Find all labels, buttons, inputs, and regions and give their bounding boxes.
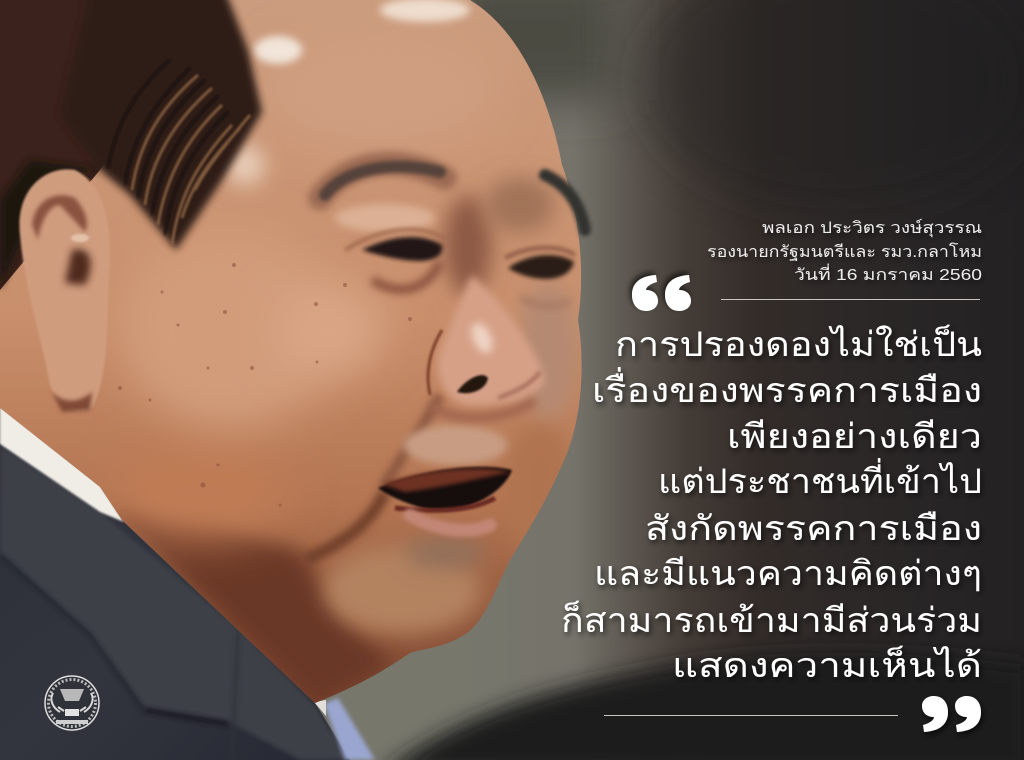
- chin: [324, 546, 480, 634]
- far cheek: [518, 426, 566, 542]
- suit jacket: [0, 443, 350, 760]
- heading: speaker attribution: วันที่ 16 มกราคม 2560: [794, 263, 982, 284]
- quote text: แสดงความเห็นได้: [672, 645, 982, 685]
- heading: speaker attribution: [707, 218, 982, 284]
- divider bottom: [604, 715, 898, 716]
- icon: closing quote mark: [922, 696, 981, 732]
- quote text: และมีแนวความคิดต่างๆ: [594, 555, 982, 593]
- hair: [0, 0, 262, 290]
- divider top: [721, 299, 980, 300]
- quote text: แต่ประชาชนที่เข้าไป: [658, 458, 982, 501]
- government seal: [45, 676, 99, 730]
- shirt collar: [0, 406, 124, 522]
- quote text: เพียงอย่างเดียว: [727, 418, 982, 456]
- eyebrows: [320, 164, 585, 230]
- icon: opening quote mark: [632, 275, 691, 311]
- quote text: ก็สามารถเข้ามามีส่วนร่วม: [561, 600, 982, 640]
- quote text: [561, 324, 982, 685]
- ear: [19, 169, 110, 412]
- mouth: [378, 467, 512, 530]
- quote text: การปรองดองไม่ใช่เป็น: [615, 324, 982, 364]
- upper lip: [403, 425, 507, 465]
- between the eyes: [444, 195, 492, 295]
- tie: [324, 698, 375, 760]
- nose: [428, 275, 545, 418]
- neck and jaw shading: [110, 510, 395, 710]
- cheek fold: [305, 492, 385, 560]
- quote text: สังกัดพรรคการเมือง: [645, 510, 982, 548]
- eyes: [345, 230, 575, 306]
- heading: speaker attribution: พลเอก ประวิตร วงษ์สุวรรณ: [762, 218, 982, 238]
- face: [0, 0, 582, 710]
- quote text: เรื่องของพรรคการเมือง: [592, 367, 982, 410]
- skin spots: [118, 263, 412, 506]
- heading: speaker attribution: รองนายกรัฐมนตรีและ รมว.กลาโหม: [707, 242, 982, 261]
- forehead and cheek light: [311, 106, 448, 130]
